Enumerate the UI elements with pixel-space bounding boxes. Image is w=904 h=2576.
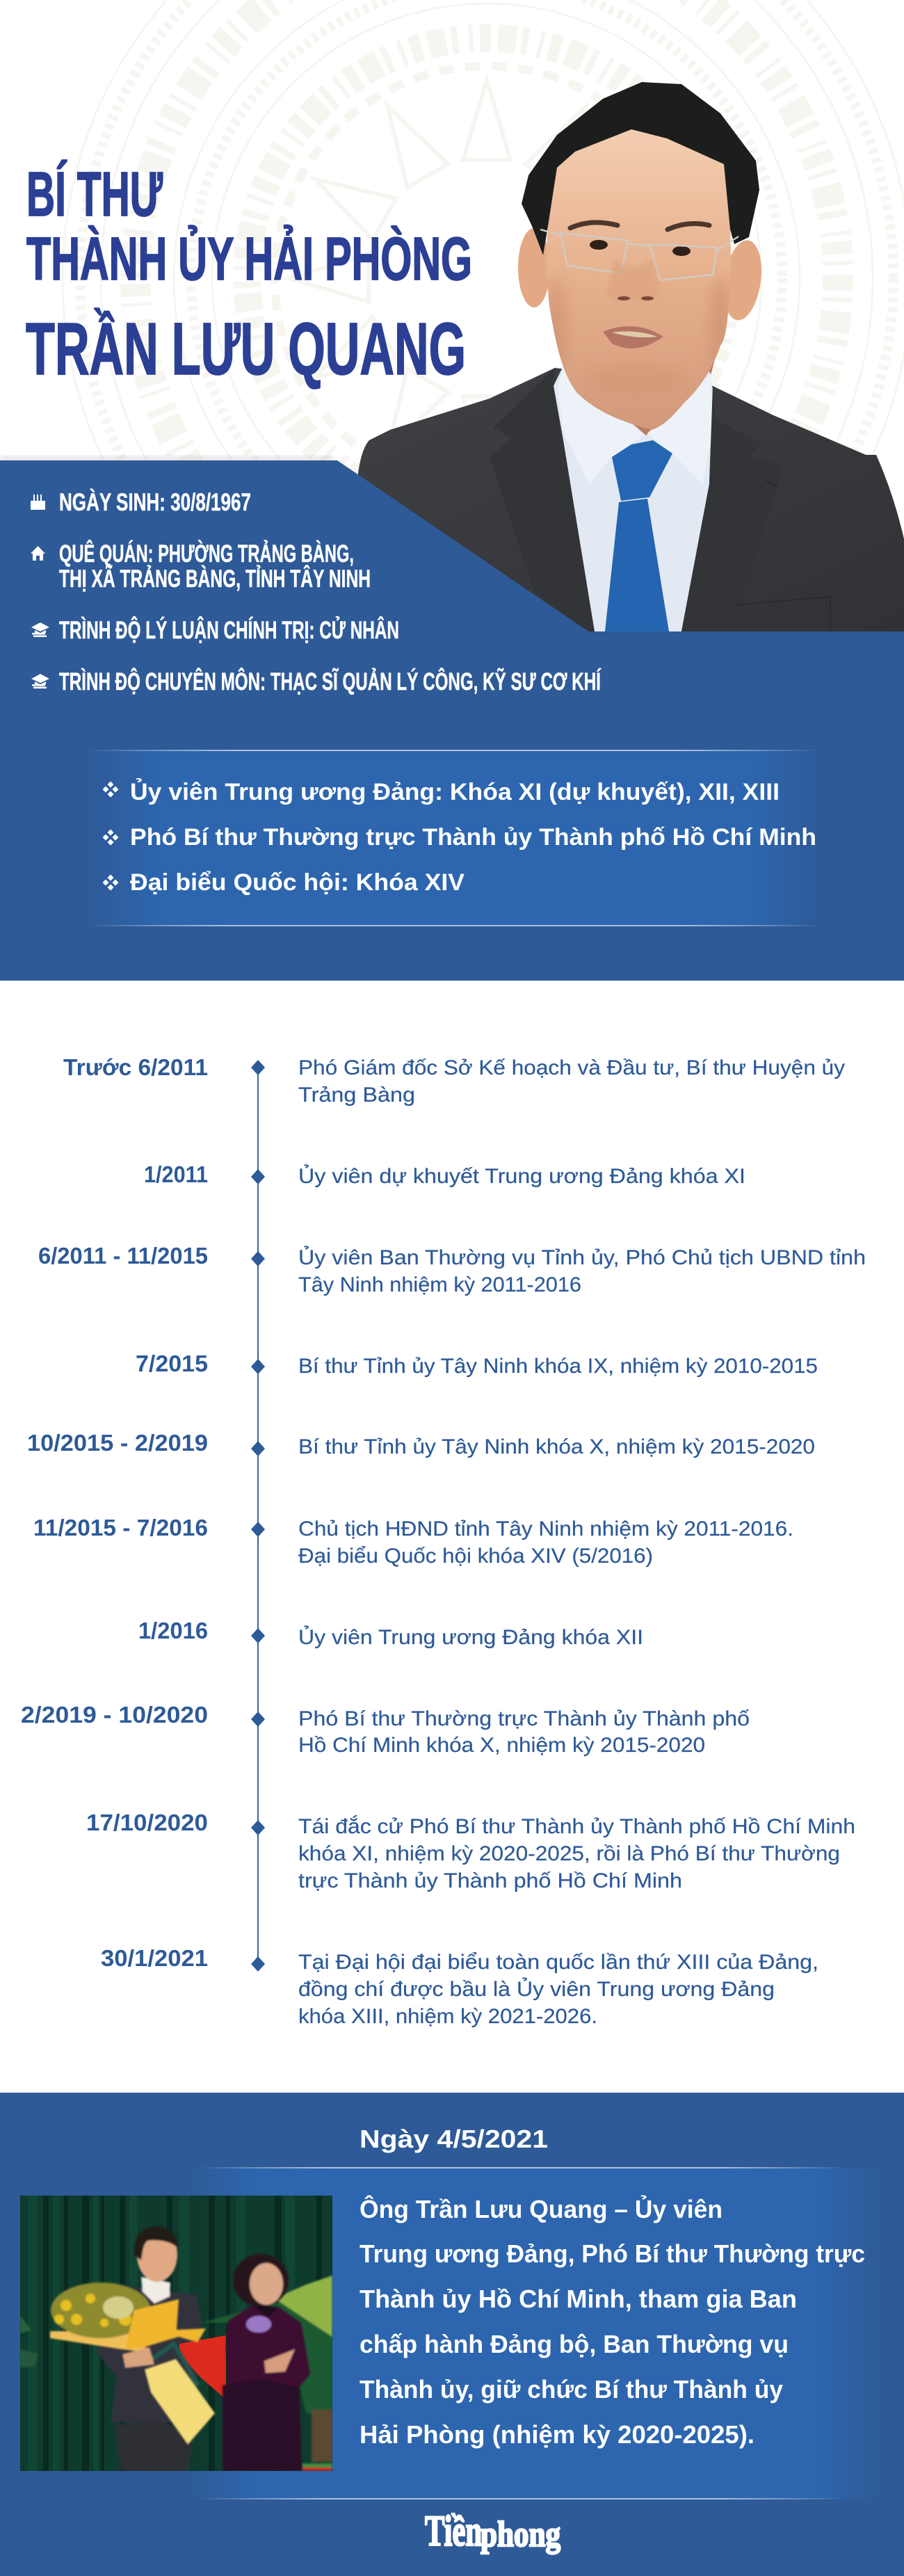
entry: 11/2015 - 7/2016: Chủ tịch HĐND tỉnh Tây Ninh nhiệm kỳ 2011-2016.	[298, 1518, 793, 1540]
entry: 1/2011: 1/2011	[144, 1161, 208, 1187]
entry: 11/2015 - 7/2016: 11/2015 - 7/2016	[33, 1515, 208, 1540]
position 3: Đại biểu Quốc hội: Khóa XIV	[130, 869, 465, 896]
entry: 2/2019 - 10/2020: 2/2019 - 10/2020	[21, 1702, 208, 1728]
entry: 17/10/2020: khóa XI, nhiệm kỳ 2020-2025, rồi là Phó Bí thư Thường	[298, 1842, 840, 1865]
title: BÍ THƯ	[26, 159, 163, 230]
entry: 1/2016: 1/2016	[138, 1618, 208, 1643]
tie	[605, 440, 672, 631]
entry: 10/2015 - 2/2019: Bí thư Tỉnh ủy Tây Ninh khóa X, nhiệm kỳ 2015-2020	[298, 1435, 815, 1458]
ears	[518, 228, 766, 323]
entry: 6/2011 - 11/2015: Ủy viên Ban Thường vụ Tỉnh ủy, Phó Chủ tịch UBND tỉnh	[298, 1246, 866, 1269]
timeline	[21, 1054, 866, 2028]
heading: date: Ngày 4/5/2021	[360, 2125, 548, 2153]
eyebrows	[570, 223, 709, 230]
suit	[358, 368, 904, 631]
entry: 1/2016	[138, 1618, 643, 1649]
entry: 17/10/2020: 17/10/2020	[86, 1810, 208, 1835]
icon: graduation cap	[31, 622, 49, 637]
photo: handover ceremony	[20, 2196, 332, 2471]
entry: 17/10/2020	[86, 1810, 855, 1892]
entry: 10/2015 - 2/2019: 10/2015 - 2/2019	[27, 1430, 208, 1456]
entry: 6/2011 - 11/2015: 6/2011 - 11/2015	[38, 1243, 208, 1269]
icon: graduation cap and books	[31, 674, 49, 689]
entry: 7/2015	[136, 1351, 818, 1378]
text: appointment description: Hải Phòng (nhiệm kỳ 2020-2025).	[360, 2420, 754, 2449]
text: appointment description: Thành ủy, giữ chức Bí thư Thành ủy	[360, 2375, 783, 2404]
info: professional level: TRÌNH ĐỘ CHUYÊN MÔN: THẠC SĨ QUẢN LÝ CÔNG, KỸ SƯ CƠ KHÍ	[59, 668, 602, 695]
logo: Tiền phong: Tiền	[425, 2508, 482, 2555]
entry: 11/2015 - 7/2016	[33, 1515, 793, 1568]
entry: 30/1/2021	[101, 1945, 818, 2028]
info: political theory level	[31, 616, 399, 644]
entry: before 6/2011: Trảng Bàng	[298, 1084, 415, 1106]
entry: 30/1/2021: Tại Đại hội đại biểu toàn quốc lần thứ XIII của Đảng,	[298, 1951, 818, 1974]
shirt	[554, 364, 713, 631]
info: birth date: NGÀY SINH: 30/8/1967	[59, 488, 251, 516]
entry: 2/2019 - 10/2020: Phó Bí thư Thường trực Thành ủy Thành phố	[298, 1707, 750, 1730]
face	[547, 129, 731, 430]
woman	[223, 2254, 310, 2471]
entry: 7/2015: 7/2015	[136, 1351, 208, 1376]
logo: Tiền phong	[425, 2508, 560, 2555]
position 2: Phó Bí thư Thường trực Thành ủy Thành phố Hồ Chí Minh	[130, 824, 816, 851]
entry: 6/2011 - 11/2015: Tây Ninh nhiệm kỳ 2011-2016	[298, 1273, 581, 1296]
palm	[20, 2276, 332, 2471]
glasses	[540, 230, 738, 280]
entry: before 6/2011	[63, 1054, 845, 1106]
position 1: Ủy viên Trung ương Đảng: Khóa XI (dự khuyết), XII, XIII	[130, 779, 780, 805]
title: TRẦN LƯU QUANG	[26, 308, 466, 390]
icon: house	[31, 546, 45, 561]
text: appointment description: Thành ủy Hồ Chí Minh, tham gia Ban	[360, 2285, 797, 2313]
text: appointment description: Ông Trần Lưu Quang – Ủy viên	[360, 2194, 723, 2223]
entry: 17/10/2020: Tái đắc cử Phó Bí thư Thành ủy Thành phố Hồ Chí Minh	[298, 1815, 855, 1838]
panel: bottom blue section	[0, 2093, 904, 2576]
portrait photo	[358, 82, 904, 631]
logo: Tiền phong: phong	[481, 2515, 560, 2554]
title: THÀNH ỦY HẢI PHÒNG	[26, 225, 472, 293]
neck	[554, 327, 723, 437]
face shading	[548, 281, 729, 366]
entry: before 6/2011: Trước 6/2011	[63, 1054, 208, 1080]
entry: 1/2011: Ủy viên dự khuyết Trung ương Đảng khóa XI	[298, 1164, 745, 1188]
jacket pocket	[734, 480, 830, 631]
icon: cake	[31, 494, 45, 510]
info: political theory level: TRÌNH ĐỘ LÝ LUẬN CHÍNH TRỊ: CỬ NHÂN	[59, 616, 399, 644]
text: appointment description: chấp hành Đảng bộ, Ban Thường vụ	[360, 2330, 789, 2358]
entry: 2/2019 - 10/2020	[21, 1702, 750, 1757]
panel: top blue info panel	[0, 456, 904, 981]
text: appointment description: Trung ương Đảng, Phó Bí thư Thường trực	[360, 2239, 865, 2268]
entry: 30/1/2021: đồng chí được bầu là Ủy viên Trung ương Đảng	[298, 1977, 775, 2001]
info: home town	[31, 540, 371, 593]
bouquet	[50, 2283, 215, 2445]
red folder	[179, 2335, 226, 2399]
entry: 30/1/2021: khóa XIII, nhiệm kỳ 2021-2026.	[298, 2005, 597, 2028]
hair	[522, 82, 759, 255]
entry: 2/2019 - 10/2020: Hồ Chí Minh khóa X, nhiệm kỳ 2015-2020	[298, 1734, 705, 1757]
eyes	[590, 240, 691, 256]
entry: 1/2016: Ủy viên Trung ương Đảng khóa XII	[298, 1625, 643, 1649]
entry: 10/2015 - 2/2019	[27, 1430, 815, 1458]
nose	[606, 259, 662, 302]
jacket lapels	[490, 368, 782, 631]
entry: 1/2011	[144, 1161, 745, 1188]
mouth	[603, 326, 663, 348]
entry: 11/2015 - 7/2016: Đại biểu Quốc hội khóa XIV (5/2016)	[298, 1545, 653, 1568]
entry: 6/2011 - 11/2015	[38, 1243, 866, 1296]
entry: 30/1/2021: 30/1/2021	[101, 1945, 208, 1971]
shirt collar	[558, 364, 713, 484]
background: bronze drum pattern	[63, 0, 904, 702]
info: birth date	[31, 488, 251, 516]
man	[97, 2226, 202, 2471]
entry: before 6/2011: Phó Giám đốc Sở Kế hoạch và Đầu tư, Bí thư Huyện ủy	[298, 1056, 845, 1079]
panel: party positions	[87, 750, 822, 926]
info: professional level	[31, 668, 602, 695]
info: home town: THỊ XÃ TRẢNG BÀNG, TỈNH TÂY NINH	[59, 565, 371, 593]
title	[26, 159, 472, 390]
entry: 7/2015: Bí thư Tỉnh ủy Tây Ninh khóa IX, nhiệm kỳ 2010-2015	[298, 1355, 818, 1378]
curtain	[20, 2196, 332, 2471]
info: home town: QUÊ QUÁN: PHƯỜNG TRẢNG BÀNG,	[59, 540, 354, 567]
text: appointment description	[360, 2194, 865, 2449]
entry: 17/10/2020: trực Thành ủy Thành phố Hồ Chí Minh	[298, 1869, 682, 1892]
